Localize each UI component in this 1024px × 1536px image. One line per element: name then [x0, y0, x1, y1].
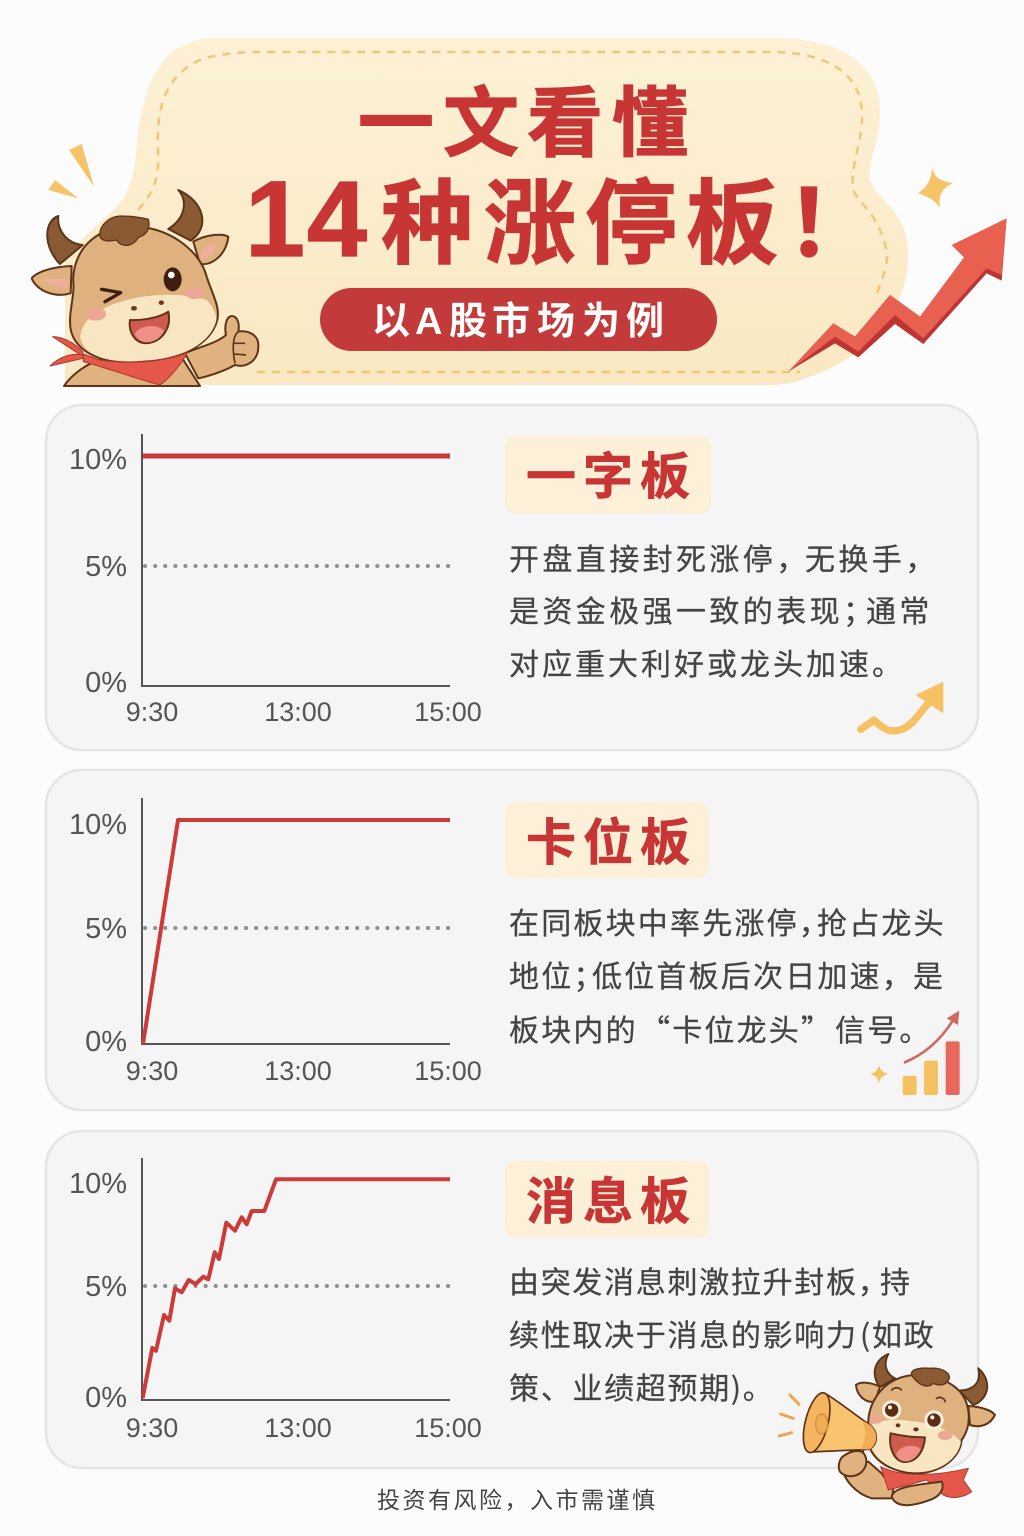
chart: 一字板: 9:30: [126, 697, 178, 727]
subtitle pill: 市: [492, 301, 530, 343]
card: 一字板: [46, 405, 978, 750]
icon: bars with arrow: [870, 1011, 960, 1095]
description: 一字板: 无换手，: [805, 535, 939, 579]
megaphone: [798, 1390, 876, 1455]
sparkle rays: [48, 144, 94, 198]
horns: [875, 1354, 987, 1405]
ears: [32, 235, 228, 295]
card: 消息板: [46, 1131, 978, 1468]
face features: [86, 267, 204, 343]
description: 消息板: 如政: [872, 1311, 935, 1355]
description: 卡位板: 低位首板后次日加速，: [592, 952, 914, 996]
description: 一字板: 开盘直接封死涨停，: [509, 535, 810, 579]
chart: 消息板: 15:00: [414, 1413, 482, 1443]
chart: 卡位板: 5%: [85, 913, 127, 945]
chart: 卡位板: [69, 798, 482, 1086]
footer disclaimer: 投资有风险，入市需谨慎: [377, 1481, 655, 1515]
title line 2: 停: [585, 150, 677, 283]
chart: 卡位板: 15:00: [414, 1056, 482, 1086]
mascot: calf with megaphone: [779, 1354, 995, 1505]
chart: 一字板: 5%: [85, 551, 127, 583]
icon: yellow up arrow: [861, 682, 943, 731]
chart: 消息板: 10%: [69, 1168, 127, 1200]
chart: 一字板: 10%: [69, 444, 127, 476]
title line 2: 涨: [484, 150, 576, 283]
chart: 消息板: 0%: [85, 1382, 127, 1414]
chart: 消息板: [69, 1158, 482, 1443]
title line 2: 4: [307, 158, 367, 279]
heading: 一字板: 一字板: [526, 437, 697, 509]
ears: [856, 1383, 995, 1426]
subtitle pill: 场: [537, 301, 575, 343]
description: 卡位板: 在同板块中率先涨停，: [509, 899, 831, 943]
muzzle: [868, 1420, 961, 1472]
hair tuft: [911, 1368, 949, 1386]
title line 1: 看: [527, 62, 603, 172]
hair tuft: [100, 216, 149, 245]
chart: 消息板: 5%: [85, 1271, 127, 1303]
heading: 消息板: 消息板: [526, 1162, 697, 1234]
description: 消息板: 续性取决于消息的影响力: [509, 1311, 858, 1355]
chart: 消息板: 13:00: [264, 1413, 332, 1443]
description: 消息板: 持: [880, 1258, 912, 1302]
scarf: [881, 1467, 972, 1497]
heading: 卡位板: 卡位板: [526, 803, 697, 875]
title line 2: ！: [786, 150, 878, 283]
rising red arrow: [788, 218, 1007, 372]
scarf knot: [50, 337, 83, 366]
body: [64, 360, 200, 386]
description: 消息板: [509, 1258, 935, 1408]
description: 卡位板: [509, 899, 946, 1050]
subtitle pill: 股: [449, 301, 487, 343]
front arm: [892, 1482, 943, 1505]
chart: 一字板: 13:00: [264, 697, 332, 727]
chart: 卡位板: 13:00: [264, 1056, 332, 1086]
subtitle pill: A: [415, 301, 442, 343]
title line 2: 种: [381, 150, 473, 283]
description: 一字板: [509, 535, 939, 684]
description: 卡位板: 信号。: [835, 1006, 932, 1050]
neck scarf: [83, 353, 187, 385]
description: 一字板: 对应重大利好或龙头加速。: [509, 640, 905, 684]
title line 2: 板: [686, 150, 778, 283]
card: 卡位板: [46, 770, 978, 1110]
description: 消息板: (: [860, 1311, 872, 1355]
inner ears: [43, 242, 217, 287]
muzzle: [80, 295, 216, 361]
description: 卡位板: 抢占龙头: [817, 899, 946, 943]
chart: 卡位板: 10%: [69, 809, 127, 841]
face features: [869, 1388, 953, 1462]
chart: 卡位板: 9:30: [126, 1056, 178, 1086]
horns: [47, 190, 202, 264]
fist: [839, 1451, 866, 1476]
arm and thumb: [185, 316, 258, 378]
head: [867, 1375, 969, 1473]
description: 卡位板: “卡位龙头”: [640, 1006, 833, 1050]
description: 卡位板: 板块内的: [509, 1006, 638, 1050]
description: 卡位板: 地位；: [509, 952, 606, 996]
title line 1: 懂: [612, 62, 688, 172]
header banner: [65, 38, 908, 385]
description: 卡位板: 是: [913, 952, 945, 996]
subtitle pill: [320, 288, 717, 351]
arm and body: [842, 1462, 893, 1498]
subtitle pill: 以: [372, 301, 410, 343]
description: 消息板: 由突发消息刺激拉升封板，: [509, 1258, 889, 1302]
subtitle pill: 例: [626, 301, 664, 343]
chart: 一字板: [69, 434, 482, 727]
head: [70, 227, 218, 362]
chart: 一字板: 15:00: [414, 697, 482, 727]
title line 1: 一: [358, 62, 434, 172]
chart: 卡位板: 0%: [85, 1026, 127, 1058]
description: 消息板: 策、业绩超预期)。: [509, 1364, 774, 1408]
mascot: winking calf thumbs up: [32, 144, 258, 386]
chart: 一字板: 0%: [85, 667, 127, 699]
subtitle pill: 为: [582, 301, 620, 343]
sparkle star: [918, 168, 953, 208]
description: 一字板: 通常: [866, 587, 933, 631]
chart: 消息板: 9:30: [126, 1413, 178, 1443]
description: 一字板: 是资金极强一致的表现；: [509, 587, 876, 631]
title line 1: 文: [443, 62, 519, 172]
sound lines: [779, 1395, 799, 1436]
title line 2: 1: [245, 158, 305, 279]
